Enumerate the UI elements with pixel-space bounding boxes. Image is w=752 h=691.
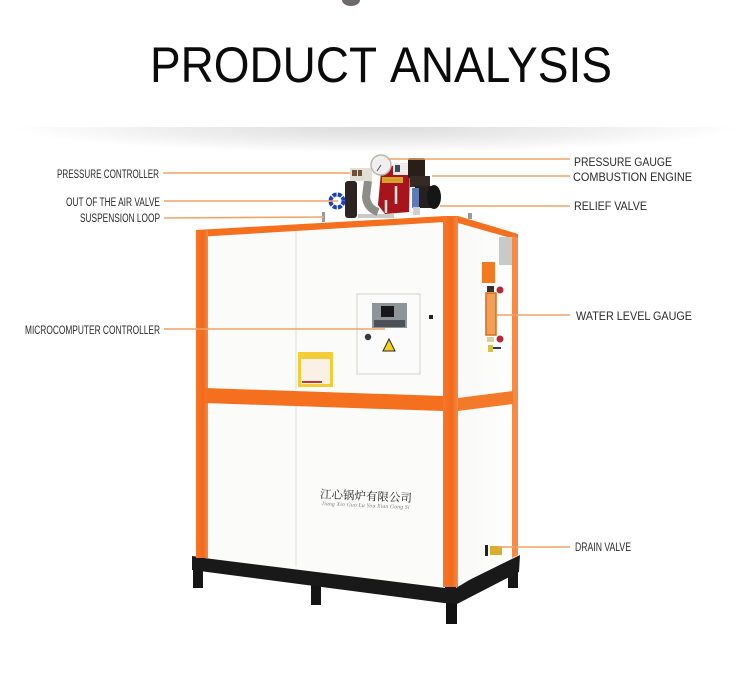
company name: 江心锅炉有限公司 (320, 486, 412, 506)
base plate (358, 214, 394, 218)
water level gauge (486, 286, 504, 352)
right side white panel (456, 219, 514, 588)
callout: relief valve: RELIEF VALVE (574, 201, 647, 213)
steel pipework (366, 181, 378, 212)
microcomputer control box (357, 294, 420, 374)
warning triangle (383, 339, 395, 351)
callout: out of the air valve: OUT OF THE AIR VALVE (66, 197, 160, 209)
front white panels (204, 219, 445, 588)
callout: pressure gauge: PRESSURE GAUGE (574, 157, 672, 169)
orange gauge box (482, 262, 495, 283)
callout: pressure controller: PRESSURE CONTROLLER (57, 169, 159, 181)
title shadow band (10, 127, 742, 153)
pressure gauge (371, 155, 391, 175)
callout: combustion engine: COMBUSTION ENGINE (573, 172, 692, 184)
callout: suspension loop: SUSPENSION LOOP (80, 213, 160, 225)
company name: Jiang Xin Guo Lu You Xian Gong Si (321, 501, 410, 511)
title: ANALYSIS (390, 37, 612, 93)
orange frame (196, 216, 518, 587)
blue hand wheel (330, 194, 344, 208)
callout: microcomputer controller: MICROCOMPUTER CONTROLLER (25, 325, 160, 337)
title (150, 37, 612, 93)
display panel (372, 303, 407, 328)
callout: water level gauge: WATER LEVEL GAUGE (576, 311, 692, 323)
yellow safety sign (298, 352, 333, 387)
steel base and legs (192, 555, 520, 624)
control box left (350, 168, 372, 181)
grey nameplate (499, 237, 512, 265)
burner assembly (322, 0, 472, 222)
button strip (374, 320, 405, 327)
knob (365, 334, 371, 340)
callout: drain valve (498, 542, 631, 554)
panel seams (295, 226, 297, 567)
screen (381, 306, 394, 317)
callout: drain valve: DRAIN VALVE (575, 542, 631, 554)
door lock (429, 315, 433, 319)
yellow burner label (382, 177, 403, 183)
suspension loops (322, 212, 472, 222)
drain valve (485, 545, 502, 556)
red burner body (378, 165, 410, 214)
white pipe (386, 186, 396, 213)
combustion engine (408, 158, 441, 215)
boiler machine (192, 0, 520, 624)
dark valve body (342, 0, 360, 218)
control box right (393, 163, 410, 175)
title: PRODUCT (150, 37, 377, 93)
